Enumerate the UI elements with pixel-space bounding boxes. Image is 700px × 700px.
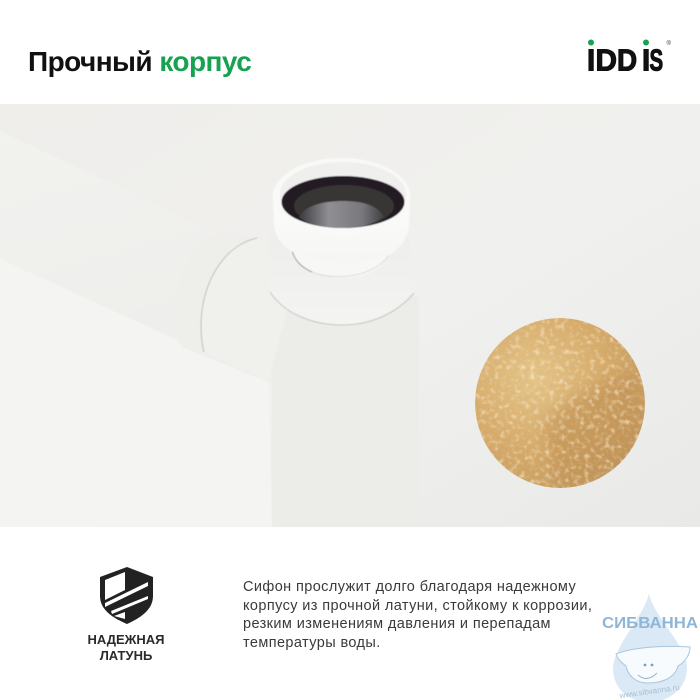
top collar [273, 198, 410, 261]
watermark: Sibvanna [602, 594, 698, 700]
logo: IDDIS [587, 40, 672, 74]
description text: температуры воды. [243, 634, 381, 650]
neck seam [292, 250, 391, 278]
watermark: Sibvanna: www.sibvanna.ru [618, 683, 680, 700]
description text: Сифон прослужит долго благодаря надежному [243, 579, 576, 595]
icon label: ЛАТУНЬ [100, 648, 152, 662]
horizontal pipe [0, 131, 290, 385]
icon label [87, 632, 165, 662]
wall below pipe [0, 259, 272, 527]
material sample: brass ball [475, 318, 650, 495]
rubber gasket [282, 176, 404, 228]
description text: резким изменениям давления и перепадам [243, 616, 551, 632]
icon label: НАДЕЖНАЯ [87, 632, 165, 647]
drain siphon [0, 131, 419, 527]
logo: IDDIS: ® [666, 40, 672, 47]
icon: shield [100, 567, 153, 624]
coupling seam [201, 238, 290, 382]
base flange [267, 232, 414, 325]
description text [243, 579, 592, 650]
darker band [545, 372, 650, 495]
pipe coupling [173, 234, 290, 382]
photo background [0, 104, 700, 527]
watermark: Sibvanna: СИБВАННА [602, 615, 698, 632]
description text: корпусу из прочной латуни, стойкому к коррозии, [243, 598, 592, 614]
vertical body [272, 296, 419, 527]
product photo panel [0, 104, 700, 527]
title: Прочный корпус [28, 46, 251, 77]
collar rim [272, 158, 410, 236]
inner tube [299, 201, 384, 228]
